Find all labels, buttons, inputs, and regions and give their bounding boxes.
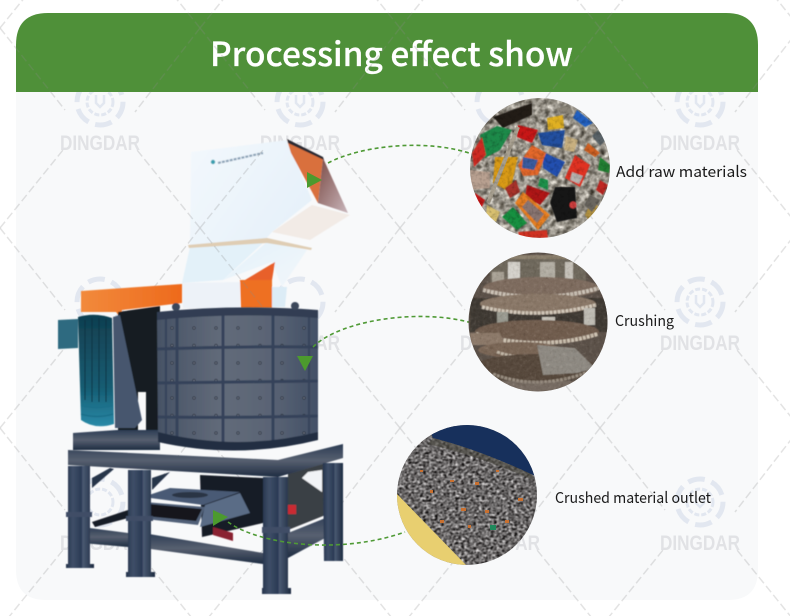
discharge chute (137, 488, 250, 527)
photo: crushed cans (468, 96, 612, 240)
dark drive behind motor (118, 306, 160, 440)
watermarks: DINGDAR logo grid: DINGDAR (660, 532, 740, 555)
watermarks: DINGDAR logo grid: DINGDAR (60, 132, 140, 155)
header band (16, 13, 758, 92)
arrow: feed (307, 172, 322, 188)
watermarks: DINGDAR logo grid (60, 79, 740, 555)
machine: crusher, motor and frame (58, 284, 343, 594)
label: crushing: Crushing (615, 310, 675, 331)
watermarks: DINGDAR logo grid: DINGDAR (460, 532, 540, 555)
watermarks: DINGDAR logo grid: DINGDAR (60, 532, 140, 555)
watermarks: DINGDAR logo grid: DINGDAR (460, 332, 540, 355)
connector: outlet (228, 522, 405, 545)
photo: crushed output (397, 425, 537, 565)
connector: raw materials (328, 145, 472, 163)
watermarks: DINGDAR logo grid: DINGDAR (260, 332, 340, 355)
frame legs (66, 466, 94, 568)
machine: feed hopper (182, 139, 350, 310)
label: raw materials: Add raw materials (616, 161, 747, 182)
motor bracket (113, 315, 142, 428)
watermarks: DINGDAR logo grid: DINGDAR (260, 132, 340, 155)
arrow: crushing (297, 356, 313, 371)
frame back and chute (200, 475, 263, 537)
table beams (68, 444, 343, 477)
motor base (73, 430, 160, 450)
label: outlet: Crushed material outlet (555, 487, 711, 508)
crusher drum (157, 302, 319, 465)
watermarks: DINGDAR logo grid: DINGDAR (460, 132, 540, 155)
hopper logo plate (211, 153, 263, 164)
watermarks: DINGDAR logo grid: DINGDAR (660, 332, 740, 355)
watermarks: DINGDAR logo grid: DINGDAR (660, 132, 740, 155)
photo: crushing chamber (468, 252, 610, 395)
motor (78, 315, 114, 426)
fan cover (58, 319, 78, 349)
orange belt guard (81, 284, 182, 317)
connector: crushing (313, 316, 472, 347)
arrow: outlet (213, 510, 228, 526)
title: Processing effect show (210, 28, 573, 76)
